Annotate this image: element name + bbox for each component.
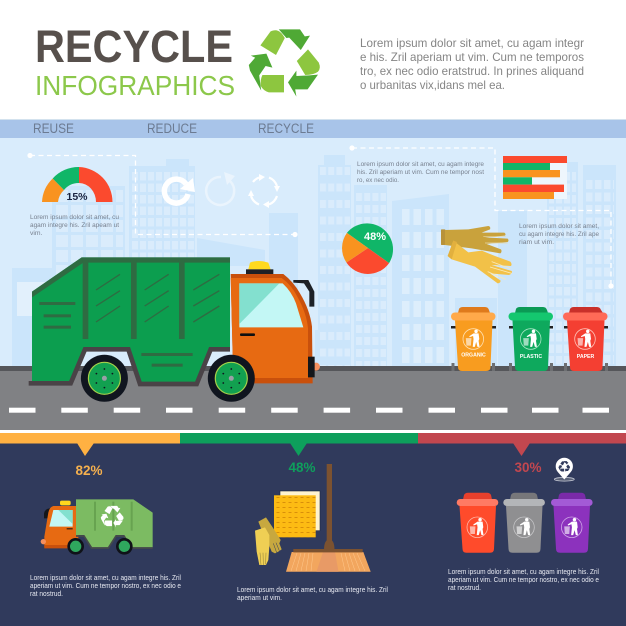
text block: bottom left: aperiam ut vim. Cum ne tempor nostro, ex nec odio e	[30, 581, 181, 590]
title: INFOGRAPHICS	[35, 70, 235, 101]
text block: top middle	[357, 161, 484, 184]
text block: bottom left: Lorem ipsum dolor sit amet, cu agam integre his. Zril	[30, 573, 181, 582]
text block: top middle: Lorem ipsum dolor sit amet, cu agam integre	[357, 161, 484, 168]
bin: plastic: PLASTIC	[520, 354, 542, 360]
top nav bar: REUSE	[33, 121, 74, 136]
stripe orange with pointer	[0, 433, 180, 456]
bin: paper	[563, 307, 608, 371]
bin: bottom grey	[503, 493, 545, 553]
icon: sponge	[274, 491, 320, 537]
icon: recycle logo	[249, 29, 320, 97]
header paragraph: Lorem ipsum dolor sit amet, cu agam integr	[360, 36, 584, 50]
small truck	[41, 499, 153, 555]
text block: bottom middle	[237, 585, 388, 602]
header paragraph: tro, ex nec odio eratstrud. In prines aliquand	[360, 64, 584, 78]
dashed connector right	[349, 145, 614, 289]
gauge caption	[30, 214, 119, 237]
pie chart 48%: 48%	[364, 231, 386, 243]
bin: bottom red	[457, 493, 498, 553]
text block: top middle: ro, ex nec odio.	[357, 177, 399, 184]
icon: recycle circle arrows	[248, 174, 280, 208]
icon: small gloves	[255, 517, 282, 565]
truck front wheel	[208, 355, 255, 402]
text block: bottom left	[30, 573, 181, 598]
text block: bottom right: aperiam ut vim. Cum ne tempor nostro, ex nec odio e	[448, 575, 599, 584]
text block: bottom middle: aperiam ut vim.	[237, 593, 282, 602]
text block: right: Lorem ipsum dolor sit amet,	[519, 223, 599, 230]
bin: organic: ORGANIC	[461, 352, 486, 358]
top nav bar	[0, 119, 626, 138]
text block: bottom right: Lorem ipsum dolor sit amet, cu agam integre his. Zril	[448, 567, 599, 576]
bin: bottom purple	[551, 493, 593, 553]
text block: bottom right: rat nostrud.	[448, 583, 481, 592]
truck cab	[231, 261, 320, 383]
text block: bottom left: rat nostrud.	[30, 589, 63, 598]
text block: bottom right	[448, 567, 599, 592]
header paragraph: o urbanitas vix,idans mel ea.	[360, 78, 505, 92]
top nav bar: RECYCLE	[258, 121, 314, 136]
truck rear wheel	[81, 355, 128, 402]
dashed connector left	[27, 153, 298, 237]
icon: reuse arrow bold	[164, 178, 195, 203]
percent 82: 82%	[75, 463, 103, 478]
bin: paper: PAPER	[577, 354, 594, 360]
percent 30: 30%	[514, 460, 542, 475]
stripe red with pointer	[418, 433, 626, 456]
text block: bottom middle: Lorem ipsum dolor sit amet, cu agam integre his. Zril	[237, 585, 388, 594]
panel: city background	[0, 138, 626, 368]
bin: organic	[451, 307, 496, 371]
gauge caption: Lorem ipsum dolor sit amet, cu	[30, 214, 119, 221]
icon: map pin	[554, 458, 574, 481]
gauge caption: vim.	[30, 230, 43, 237]
gauge caption: agam integre his. Zril apeam ut	[30, 222, 119, 229]
percent 48: 48%	[288, 460, 316, 475]
garbage truck	[29, 257, 320, 402]
header paragraph: e his. Zril aperiam ut vim. Cum ne temporos	[360, 50, 584, 64]
icon: reduce arrow thin	[206, 172, 235, 205]
icon: broom	[286, 464, 371, 572]
title	[35, 21, 235, 101]
pie chart 48%	[342, 223, 393, 274]
header paragraph	[360, 36, 584, 92]
gauge chart 15%	[42, 167, 113, 203]
bin: plastic	[508, 307, 553, 371]
header band	[0, 0, 626, 120]
top nav bar: REDUCE	[147, 121, 197, 136]
icon: white recycle on small truck	[101, 506, 124, 528]
panel: bottom dark	[0, 443, 626, 626]
stripe green with pointer	[180, 433, 418, 456]
title: RECYCLE	[35, 21, 233, 72]
text block: right: riam ut vim.	[519, 239, 554, 246]
icon: gloves	[441, 226, 512, 283]
gauge chart 15%: 15%	[66, 191, 88, 203]
text block: top middle: his. Zril aperiam ut vim. Cum ne tempor nost	[357, 169, 484, 176]
text block: right	[519, 223, 599, 246]
text block: right: cu agam integre his. Zril ape	[519, 231, 599, 238]
truck body	[29, 257, 230, 384]
bar chart	[503, 156, 567, 199]
road	[0, 366, 626, 430]
